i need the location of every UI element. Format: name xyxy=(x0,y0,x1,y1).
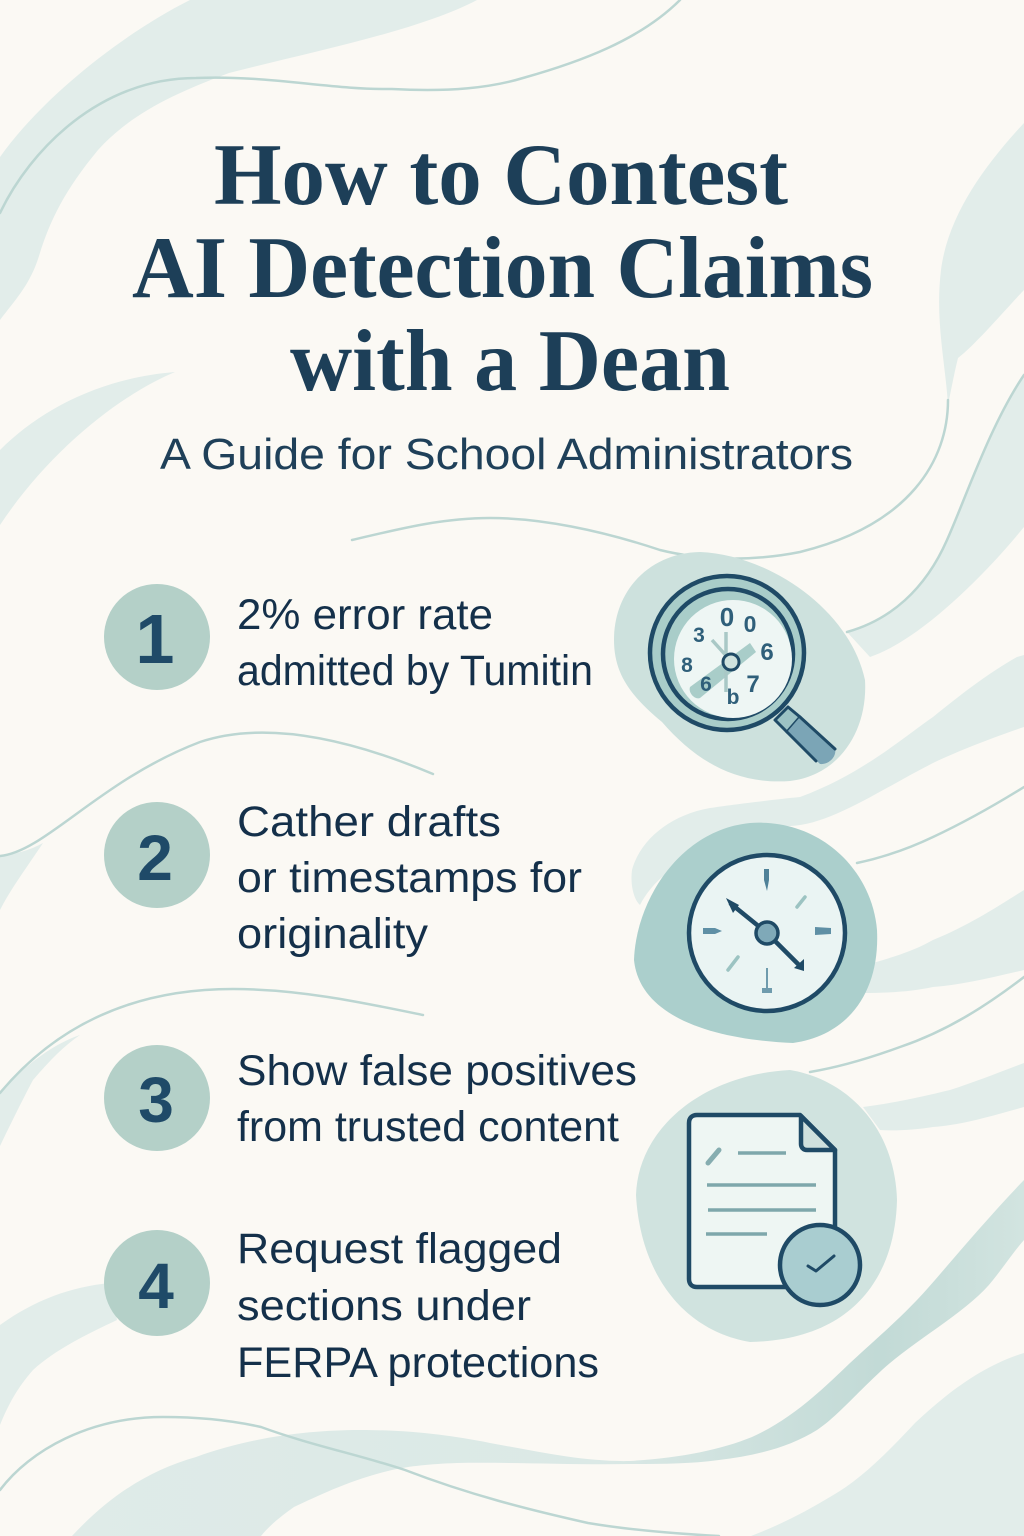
number badge 2 xyxy=(104,802,210,908)
number badge 3 xyxy=(104,1045,210,1151)
icon: magnifying glass over numbers: 3 xyxy=(693,624,705,647)
icon: clock xyxy=(634,823,877,1043)
step 3 text xyxy=(237,1047,637,1151)
number badge 3: 3 xyxy=(138,1064,174,1136)
icon: magnifying glass over numbers: 6 xyxy=(760,639,774,666)
step 3 text: from trusted content xyxy=(237,1103,619,1151)
icon: magnifying glass over numbers: 8 xyxy=(681,654,693,677)
number badge 2: 2 xyxy=(137,822,173,894)
step 2 text: or timestamps for xyxy=(237,854,582,902)
step 4 xyxy=(104,1225,599,1387)
icon: magnifying glass over numbers: 7 xyxy=(746,671,760,698)
decorative bottom wave xyxy=(72,1180,1024,1536)
title: How to Contest xyxy=(214,127,788,224)
step 2 xyxy=(104,798,582,958)
title xyxy=(132,127,873,410)
icon: magnifying glass over numbers: 6 xyxy=(700,673,712,696)
icon: magnifying glass over numbers: 0 xyxy=(744,611,756,637)
subtitle: A Guide for School Administrators xyxy=(160,430,853,479)
number badge 4: 4 xyxy=(138,1250,174,1322)
step 2 text xyxy=(237,798,582,958)
step 2 text: Cather drafts xyxy=(237,798,501,846)
icon: magnifying glass over numbers: b xyxy=(727,686,739,709)
icon: magnifying glass over numbers xyxy=(614,552,865,781)
number badge 1 xyxy=(104,584,210,690)
title: with a Dean xyxy=(290,313,730,410)
step 4 text: sections under xyxy=(237,1282,531,1330)
number badge 1: 1 xyxy=(136,600,174,678)
step 3 text: Show false positives xyxy=(237,1047,637,1095)
step 2 text: originality xyxy=(237,910,429,958)
icon: magnifying glass over numbers: 0 xyxy=(720,602,734,632)
number badge 4 xyxy=(104,1230,210,1336)
title: AI Detection Claims xyxy=(132,220,873,317)
step 4 text xyxy=(237,1225,599,1387)
step 1 text: admitted by Tumitin xyxy=(237,647,593,695)
step 4 text: FERPA protections xyxy=(237,1339,599,1387)
icon: document with check xyxy=(636,1070,897,1342)
step 1 text xyxy=(237,591,593,695)
step 1 text: 2% error rate xyxy=(237,591,493,639)
step 4 text: Request flagged xyxy=(237,1225,562,1273)
step 1 xyxy=(104,584,593,695)
step 3 xyxy=(104,1045,637,1151)
